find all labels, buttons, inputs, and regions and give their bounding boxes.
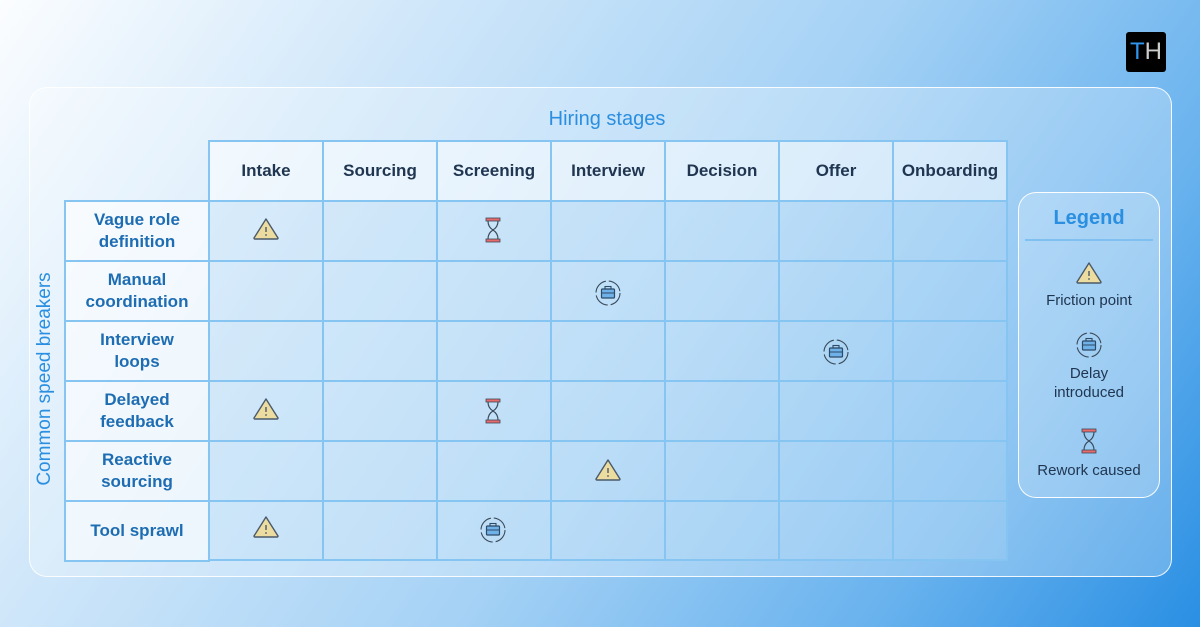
matrix table: Manual <box>108 270 166 289</box>
heading: Hiring stages: Hiring stages <box>549 108 665 130</box>
matrix table: Interview <box>100 330 174 349</box>
matrix table: feedback <box>100 412 174 431</box>
legend: friction <box>1046 262 1132 309</box>
legend title: Legend <box>1053 207 1125 229</box>
legend: delay: introduced <box>1054 384 1124 401</box>
matrix table: Offer <box>816 161 856 180</box>
matrix table: loops <box>114 352 160 371</box>
matrix table: Interview <box>571 161 645 180</box>
matrix table: Reactive <box>102 450 172 469</box>
logo <box>1126 32 1166 72</box>
panel: main <box>29 87 1172 577</box>
legend: rework <box>1037 428 1141 479</box>
matrix table: coordination <box>86 292 188 311</box>
matrix table: definition <box>99 232 175 251</box>
matrix table: Onboarding <box>902 161 998 180</box>
matrix table: Tool sprawl <box>90 521 184 540</box>
matrix table: Screening <box>453 161 535 180</box>
matrix table: sourcing <box>101 472 173 491</box>
matrix table: Vague role <box>94 210 180 229</box>
legend <box>1018 192 1160 498</box>
legend: delay: Delay <box>1070 365 1108 382</box>
logo: TH <box>1130 38 1162 65</box>
matrix table: Intake <box>241 161 291 180</box>
grid body <box>208 200 1008 561</box>
matrix table: Decision <box>687 161 757 180</box>
matrix table: Sourcing <box>343 161 417 180</box>
icons <box>253 218 279 240</box>
matrix table <box>64 140 1008 562</box>
legend: delay <box>1054 332 1124 401</box>
vertical label: Common speed breakers <box>34 272 55 486</box>
legend: rework: Rework caused <box>1037 462 1141 479</box>
legend: friction: Friction point <box>1046 292 1132 309</box>
matrix table: Delayed <box>104 390 170 409</box>
